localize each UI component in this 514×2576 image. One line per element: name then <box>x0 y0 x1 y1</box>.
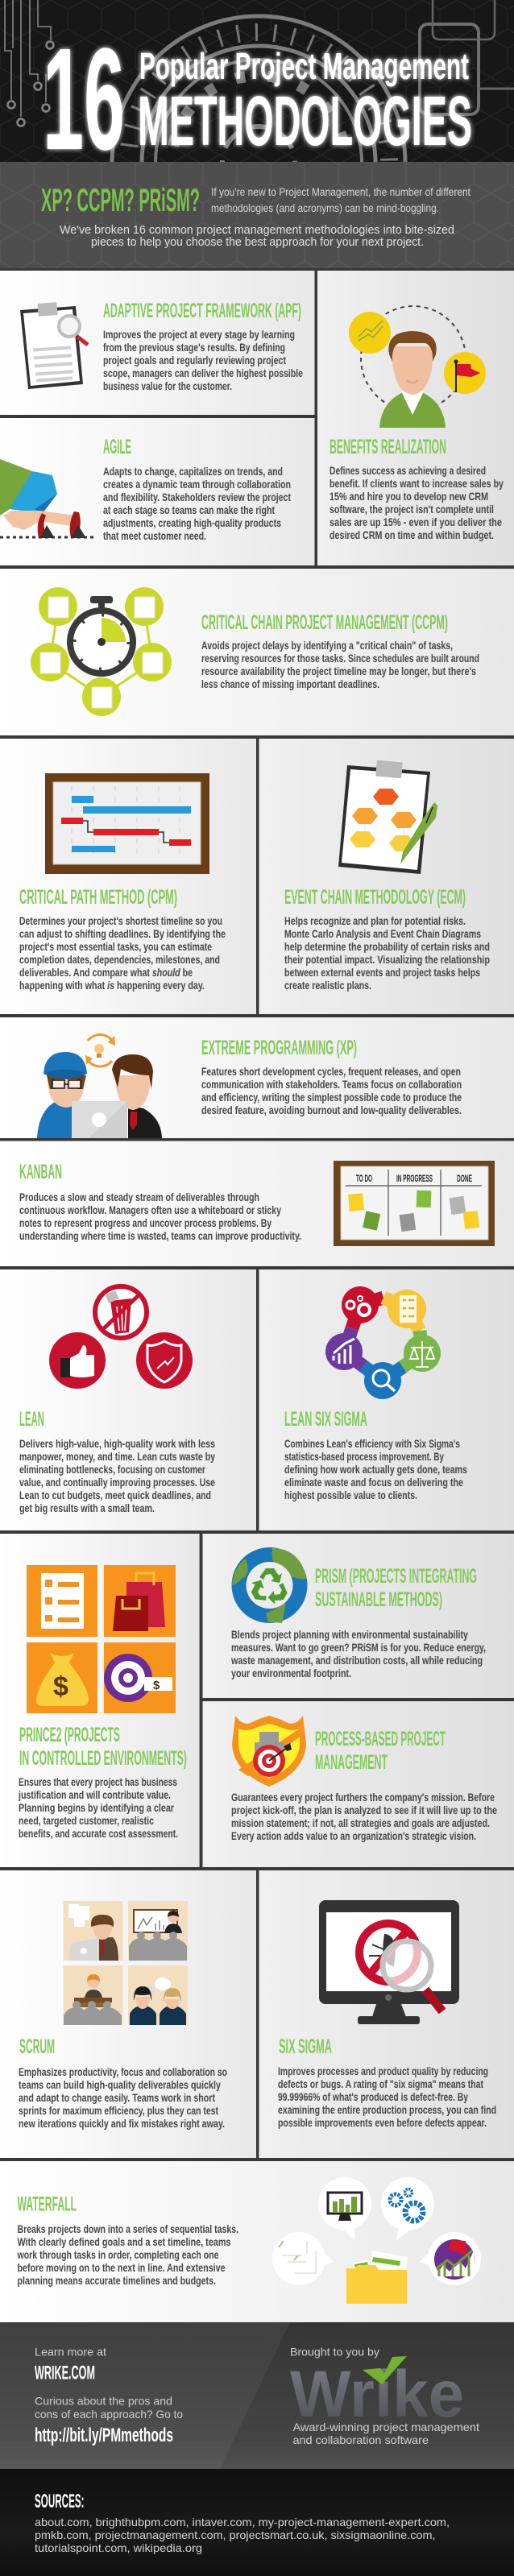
text: source list <box>35 2516 450 2554</box>
icon: person with chart and flag <box>349 306 486 428</box>
text: Kanban description: notes to represent progress and uncover process problems. By <box>19 1216 272 1229</box>
panel: waterfall: WATERFALL <box>18 2193 77 2215</box>
text: Benefits description <box>330 464 504 541</box>
text: source list: pmkb.com, projectmanagement.com, projectsmart.co.uk, sixsigmaonline.com, <box>35 2528 435 2541</box>
text: Scrum description: and adapt to change easily. Teams work in short <box>19 2091 215 2104</box>
panel: PRINCE2: IN CONTROLLED ENVIRONMENTS) <box>19 1747 187 1770</box>
heading: Lean Six Sigma: LEAN SIX SIGMA <box>284 1408 367 1431</box>
panel: critical path method <box>0 739 256 1014</box>
text: Waterfall description: Breaks projects down into a series of sequential tasks. <box>18 2222 238 2235</box>
text: Kanban description: continuous workflow. Managers often use a whiteboard or sticky <box>19 1203 281 1216</box>
header: title area <box>0 0 514 162</box>
title: 16: 16 <box>43 19 125 180</box>
panel: lean <box>0 1269 256 1530</box>
text: learn more: Learn more at <box>35 2346 106 2359</box>
intro text: bite-sized pieces <box>60 223 454 249</box>
panel: scrum <box>0 1870 256 2158</box>
text: CPM description: project's most essential tasks, you can estimate <box>19 940 212 953</box>
text: source list: about.com, brighthubpm.com, intaver.com, my-project-management-expert.com, <box>35 2516 450 2528</box>
text: CPM description: happening with what is happening every day. <box>19 979 205 992</box>
text: Kanban description <box>19 1191 301 1242</box>
text: ECM description: create realistic plans. <box>284 979 371 992</box>
text: source list: tutorialspoint.com, wikipedia.org <box>35 2541 202 2554</box>
icon: checklist, bags, money and target tiles: $ <box>153 1679 160 1692</box>
text: PRINCE2 description: justification and will contribute value. <box>18 1788 171 1801</box>
panel: critical chain project management <box>0 569 514 735</box>
text: APF description: Improves the project at every stage by learning <box>103 328 295 341</box>
intro band <box>0 162 514 270</box>
panel: process-based project management <box>202 1701 514 1867</box>
icon: two developers with laptop <box>37 1034 162 1138</box>
heading: Process-Based <box>315 1728 446 1774</box>
text: PRINCE2 description: need, targeted customer, realistic <box>19 1814 154 1827</box>
text: Waterfall description: before moving on to the next in line. And extensive <box>18 2261 226 2274</box>
text: CPM description <box>19 914 226 992</box>
text: Lean Six Sigma description: highest possible value to clients. <box>284 1489 417 1501</box>
panel: extreme programming <box>0 1017 514 1138</box>
link: wrike.com: WRIKE.COM <box>35 2362 95 2384</box>
text: CPM description: deliverables. And compare what should be <box>19 966 193 979</box>
text: Agile description <box>103 465 291 542</box>
text: PRINCE2 description <box>18 1775 178 1840</box>
intro text: bite-sized pieces: We've broken 16 common project management methodologies into bite-sized <box>60 223 454 237</box>
heading: PRINCE2 <box>19 1724 187 1770</box>
text: curious about pros and cons: Curious about the pros and <box>35 2394 172 2407</box>
icon: stopwatch with task network <box>31 587 172 716</box>
icon: checklist, bags, money and target tiles: $ <box>53 1671 68 1702</box>
text: Lean Six Sigma description: eliminate waste and focus on delivering the <box>284 1476 463 1489</box>
panel: waterfall <box>0 2161 514 2322</box>
text: Kanban description: understanding where time is wasted, teams can improve productivity. <box>19 1229 301 1242</box>
icon: checklist, bags, money and target tiles <box>27 1565 176 1713</box>
text: award-winning tagline <box>293 2421 479 2446</box>
footer: sources <box>0 2469 514 2576</box>
icon: four team scenes <box>63 1901 188 2025</box>
text: Lean description: manpower, money, and time. Lean cuts waste by <box>19 1450 215 1463</box>
icon: speech bubbles around folder <box>272 2177 481 2304</box>
text: Waterfall description: planning means accurate timelines and budgets. <box>18 2274 216 2287</box>
text: Kanban description: Produces a slow and steady stream of deliverables through <box>19 1191 259 1203</box>
text: Process-Based description <box>231 1791 497 1842</box>
intro text: new to project management <box>211 186 470 214</box>
icon: kanban board: TO DO <box>356 1173 372 1184</box>
heading: CPM: CRITICAL PATH METHOD (CPM) <box>19 886 177 909</box>
text: PRINCE2 description: benefits, and accurate cost assessment. <box>19 1827 178 1840</box>
icon: shield with target and building <box>232 1716 306 1787</box>
intro text: new to project management: methodologies (and acronyms) can be mind-boggling. <box>211 202 439 214</box>
panel: agile: AGILE <box>103 436 131 458</box>
text: Agile description: creates a dynamic team through collaboration <box>103 478 291 491</box>
panel: kanban <box>0 1141 514 1266</box>
panel: benefits realization <box>317 270 514 566</box>
text: award-winning tagline: and collaboration software <box>293 2433 429 2446</box>
icon: clipboard with magnifier <box>20 302 88 389</box>
text: PRINCE2 description: Ensures that every project has business <box>19 1775 177 1788</box>
icon: five-step improvement ring <box>325 1286 441 1399</box>
heading: PRiSM <box>315 1565 477 1611</box>
panel: event chain methodology <box>259 739 514 1014</box>
icon: monitor with bug and magnifier <box>319 1900 459 2024</box>
panel: agile <box>0 418 315 566</box>
text: APF description: project goals and regularly reviewing project <box>103 354 286 367</box>
panel: lean: LEAN <box>19 1408 44 1431</box>
text: APF description <box>103 328 303 392</box>
text: ECM description <box>284 914 490 992</box>
panel: PRiSM <box>202 1534 514 1698</box>
panel: kanban: KANBAN <box>19 1161 62 1183</box>
text: Scrum description: sprints for maximum efficiency, plus they can test <box>19 2104 218 2117</box>
text: Scrum description: Emphasizes productivity, focus and collaboration so <box>19 2065 227 2078</box>
heading: XP: EXTREME PROGRAMMING (XP) <box>201 1037 357 1059</box>
intro text: new to project management: If you're new to Project Management, the number of different <box>211 186 470 198</box>
text: Agile description: and flexibility. Stakeholders review the project <box>103 491 291 503</box>
panel: adaptive project framework <box>0 270 315 416</box>
text: APF description: from the previous stage's results. By defining <box>103 341 285 354</box>
footer: sources: SOURCES: <box>35 2491 84 2512</box>
icon: clipboard flowchart with pen <box>338 760 437 874</box>
text: APF description: scope, managers can deliver the highest possible <box>103 367 303 379</box>
heading: Six Sigma: SIX SIGMA <box>279 2036 332 2058</box>
panel: PRINCE2 <box>0 1534 199 1867</box>
text: CCPM description: less chance of missing important deadlines. <box>201 677 379 690</box>
text: Waterfall description: With clearly defined goals and a set timeline, teams <box>18 2235 231 2248</box>
heading: Process-Based: MANAGEMENT <box>315 1751 388 1774</box>
icon: kanban board <box>334 1161 495 1246</box>
heading: PRINCE2: PRINCE2 (PROJECTS <box>19 1724 120 1746</box>
text: award-winning tagline: Award-winning project management <box>293 2421 479 2433</box>
text: Lean description: value, and continually improving processes. Use <box>19 1476 215 1489</box>
text: curious about pros and cons <box>35 2394 183 2421</box>
text: PRiSM description <box>230 1628 486 1679</box>
icon: globe with recycling symbol <box>232 1547 308 1623</box>
text: XP description <box>201 1065 462 1116</box>
icon: runner at start line <box>0 459 93 538</box>
text: Waterfall description: work through tasks in order, completing each one <box>17 2248 219 2261</box>
text: Six Sigma description <box>278 2065 496 2129</box>
text: Lean Six Sigma description <box>284 1437 467 1501</box>
intro text: bite-sized pieces: pieces to help you choose the best approach for your next project. <box>91 235 424 249</box>
icon: kanban board: IN PROGRESS <box>396 1173 433 1184</box>
text: PRiSM description: your environmental footprint. <box>231 1667 351 1679</box>
text: brought to you by: Brought to you by <box>290 2346 379 2359</box>
text: CPM description: Determines your project's shortest timeline so you <box>19 914 222 927</box>
link: bit.ly: http://bit.ly/PMmethods <box>35 2425 173 2446</box>
text: CCPM description <box>201 639 479 690</box>
text: APF description: business value for the customer. <box>103 379 232 392</box>
text: Scrum description <box>19 2065 227 2130</box>
text: PRINCE2 description: Planning begins by identifying a clear <box>19 1801 174 1814</box>
text: Lean description: Delivers high-value, high-quality work with less <box>19 1437 215 1450</box>
icon: waste ban, thumbs up and shield <box>49 1286 193 1389</box>
panel: six sigma <box>259 1870 514 2158</box>
text: Agile description: at each stage so teams can make the right <box>103 503 275 516</box>
icon: kanban board: DONE <box>457 1173 472 1184</box>
text: Agile description: Adapts to change, capitalizes on trends, and <box>103 465 283 478</box>
panel: adaptive project framework: ADAPTIVE PROJECT FRAMEWORK (APF) <box>103 300 301 322</box>
text: Lean Six Sigma description: statistics-based process improvement. By <box>284 1450 444 1463</box>
text: Waterfall description <box>17 2222 238 2287</box>
text: Agile description: that meet customer need. <box>103 529 206 542</box>
panel: lean six sigma <box>259 1269 514 1530</box>
text: CPM description: can adjust to shifting deadlines. By identifying the <box>19 927 226 940</box>
text: Scrum description: teams can build high-quality deliverables quickly <box>19 2078 221 2091</box>
icon: gantt chart board <box>45 773 209 874</box>
text: Lean description: Lean to cut budgets, meet quick deadlines, and <box>19 1489 211 1501</box>
text: CPM description: completion dates, dependencies, milestones, and <box>19 953 220 966</box>
text: Lean description: get big results with a small team. <box>19 1501 155 1514</box>
text: Lean description: eliminating bottlenecks, focusing on customer <box>19 1463 205 1476</box>
header decoration: circuit lines and gear <box>4 0 514 162</box>
footer: learn more and brand <box>0 2322 514 2469</box>
text: Agile description: adjustments, creating high-quality products <box>103 516 281 529</box>
text: Lean description <box>19 1437 215 1514</box>
panel: scrum: SCRUM <box>19 2036 55 2058</box>
intro heading: acronyms: XP? CCPM? PRiSM? <box>41 183 200 218</box>
logo: Wrike: Wrike <box>290 2358 464 2431</box>
text: curious about pros and cons: cons of each approach? Go to <box>35 2408 183 2421</box>
text: Scrum description: new iterations quickly and fix mistakes right away. <box>19 2117 225 2130</box>
